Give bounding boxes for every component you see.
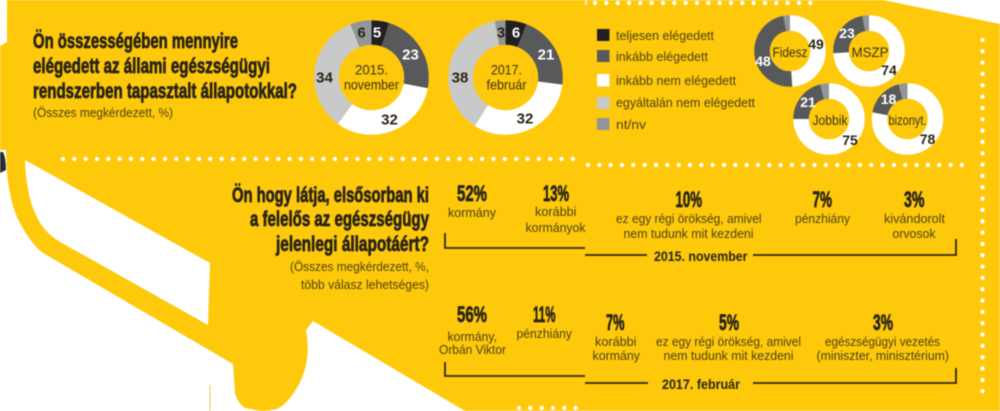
stat: 3% emigrated doctors: [884, 187, 945, 241]
small donut: undecided: 78: [920, 131, 935, 147]
donut chart: 2015 november: 5: [373, 24, 381, 42]
legend: teljesen elégedett: [616, 28, 714, 43]
donut chart: 2015 november: 32: [381, 112, 398, 128]
stat: 13% previous governments: korábbi: [535, 204, 577, 219]
subheading: base of second question: több válasz lehetséges): [301, 277, 429, 292]
donut chart: 2017 february: 6: [512, 24, 520, 42]
stat row: 2015 november: [445, 181, 956, 264]
heading: overall satisfaction question: [33, 30, 297, 103]
small donut: Jobbik: 21: [800, 94, 816, 110]
stat: 5% old legacy: [656, 310, 801, 363]
small donut: Fidesz: 48: [755, 53, 771, 69]
donut chart: 2017 february: 2017.: [491, 62, 522, 78]
stat: 3% health management: (miniszter, minisztérium): [816, 348, 949, 363]
donut chart: 2015 november: [316, 24, 419, 128]
bracket: 2017 february: [445, 362, 956, 392]
stat: 7% lack of money: 7%: [812, 187, 832, 212]
bracket: 2017 february: 2017. február: [662, 376, 740, 392]
legend: inkább elégedett: [616, 49, 708, 64]
stat: 56% government, Orbán Viktor: [439, 302, 507, 357]
stat: 52% government: 52%: [457, 181, 487, 206]
stat: 10% old legacy: [616, 187, 762, 241]
stat: 3% health management: egészségügyi vezetés: [825, 334, 940, 349]
stat: 52% government: [448, 181, 496, 220]
stat: 11% lack of money: 11%: [533, 302, 556, 327]
heading: responsibility question: Ön hogy látja, elsősorban ki: [232, 184, 429, 207]
white inner cut-out: [25, 160, 210, 325]
stat: 10% old legacy: nem tudunk mit kezdeni: [624, 226, 754, 241]
small donut: Jobbik: [800, 91, 858, 148]
donut chart: 2015 november: 34: [316, 70, 333, 86]
heading: overall satisfaction question: rendszerben tapasztalt állapotokkal?: [33, 80, 297, 103]
small donut: undecided: [880, 91, 936, 147]
stat: 11% lack of money: pénzhiány: [516, 326, 572, 341]
stat: 3% emigrated doctors: kivándorolt: [884, 211, 945, 226]
stat: 56% government, Orbán Viktor: Orbán Viktor: [439, 342, 507, 357]
donut chart: 2017 february: 3: [497, 24, 505, 42]
stat: 3% emigrated doctors: orvosok: [892, 226, 936, 241]
heading: responsibility question: jelenlegi állapotáért?: [275, 233, 429, 256]
small donut: MSZP: MSZP: [852, 44, 888, 60]
small donut: undecided: bizonyt.: [888, 112, 926, 128]
stat: 7% previous government: [592, 310, 640, 363]
stat: 5% old legacy: 5%: [719, 310, 739, 335]
stat: 5% old legacy: ez egy régi örökség, amivel: [656, 334, 801, 349]
donut chart: 2015 november: 6: [357, 24, 366, 42]
stat: 52% government: kormány: [448, 205, 496, 220]
stat: 13% previous governments: 13%: [543, 181, 569, 206]
stat: 3% health management: 3%: [873, 310, 893, 335]
stat: 7% lack of money: [795, 187, 850, 226]
legend: inkább nem elégedett: [616, 73, 736, 88]
stat: 7% previous government: kormány: [592, 348, 640, 363]
bracket: 2015 november: 2015. november: [654, 248, 748, 264]
donut chart: 2015 november: november: [344, 76, 399, 92]
donut chart: 2017 february: február: [486, 76, 527, 92]
stat: 10% old legacy: ez egy régi örökség, amivel: [616, 211, 762, 226]
small donut: undecided: 18: [881, 91, 896, 107]
stat: 56% government, Orbán Viktor: 56%: [457, 302, 487, 327]
thin vertical line: [210, 385, 211, 411]
small donut: Jobbik: Jobbik: [812, 112, 848, 128]
subheading: base of second question: (Összes megkérdezett, %,: [290, 259, 429, 274]
stat: 5% old legacy: nem tudunk mit kezdeni: [664, 348, 794, 363]
dark edge fragment: [0, 152, 6, 173]
stat: 56% government, Orbán Viktor: kormány,: [448, 329, 497, 344]
donut chart: 2017 february: 32: [517, 110, 533, 128]
donut chart: 2017 february: 21: [538, 46, 554, 64]
small donut: Fidesz: Fidesz: [772, 44, 808, 60]
donut chart: 2015 november: 2015.: [355, 62, 388, 78]
stat: 13% previous governments: kormányok: [526, 220, 586, 235]
small donut: MSZP: 74: [881, 62, 897, 78]
stat: 10% old legacy: 10%: [676, 187, 702, 212]
stat row: 2017 february: [439, 302, 956, 392]
small donut: MSZP: 23: [839, 25, 855, 41]
stat: 7% previous government: korábbi: [595, 334, 637, 349]
heading: overall satisfaction question: elégedett az állami egészségügyi: [33, 55, 270, 78]
donut chart: 2017 february: [452, 24, 554, 128]
subheading: base of first question: (Összes megkérdezett, %): [33, 105, 173, 120]
small donut: MSZP: [839, 23, 897, 79]
bracket: 2015 november: [445, 233, 956, 264]
heading: responsibility question: a felelős az egészségügy: [250, 208, 429, 231]
heading: responsibility question: [232, 184, 429, 256]
stat: 3% emigrated doctors: 3%: [904, 187, 924, 212]
legend: egyáltalán nem elégedett: [616, 95, 755, 110]
small donut: Jobbik: 75: [842, 132, 858, 148]
donut chart: 2017 february: 38: [452, 70, 468, 86]
stat: 13% previous governments: [526, 181, 586, 235]
stat: 7% previous government: 7%: [606, 310, 624, 335]
stat: 7% lack of money: pénzhiány: [795, 211, 850, 226]
stat: 3% health management: [816, 310, 949, 363]
legend: nt/nv: [616, 117, 647, 132]
subheading: base of second question: [290, 259, 429, 292]
small donut: Fidesz: 49: [808, 36, 824, 52]
stat: 11% lack of money: [516, 302, 572, 341]
small donut: Fidesz: [755, 23, 824, 79]
donut chart: 2015 november: 23: [402, 46, 419, 64]
heading: overall satisfaction question: Ön összességében mennyire: [33, 30, 238, 53]
legend: [597, 28, 755, 132]
